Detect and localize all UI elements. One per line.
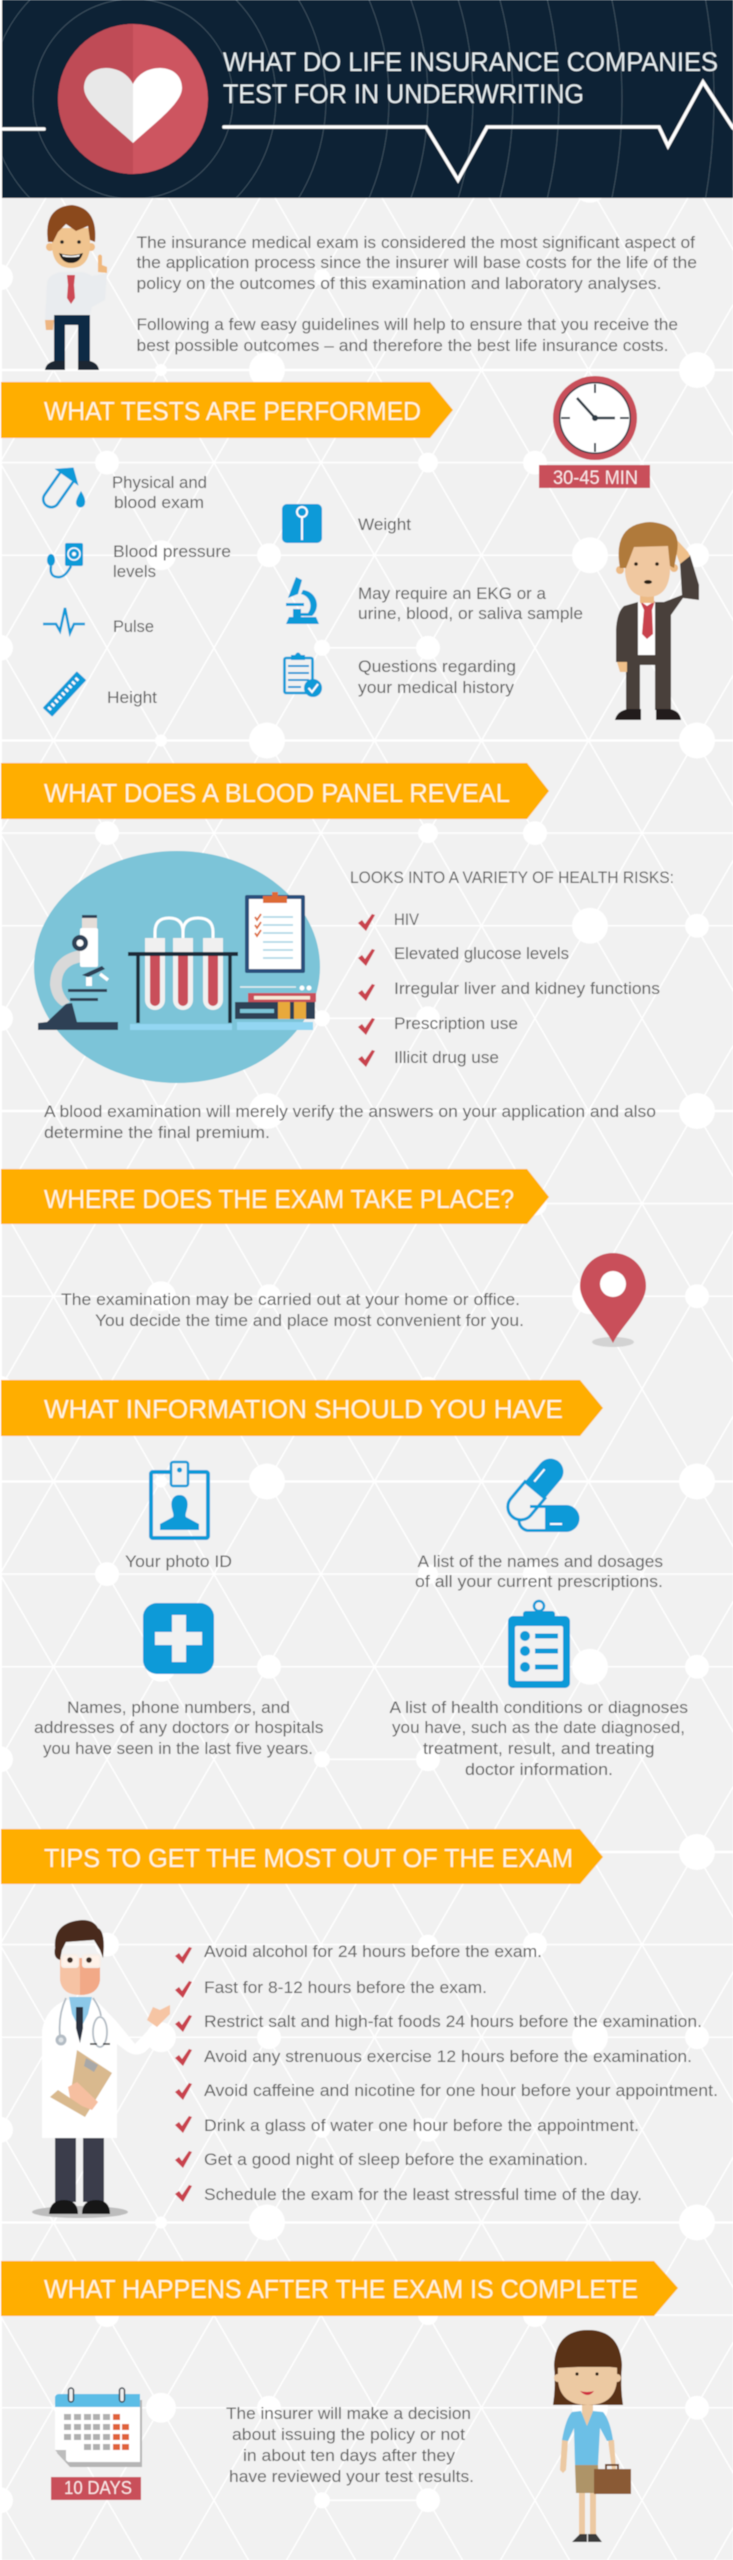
panel: after the exam: [1, 2261, 678, 2542]
heading banner: [1, 1380, 603, 1436]
text: blood pressure levels: [113, 543, 231, 581]
text: weight: Weight: [358, 516, 411, 534]
checklist: health risks: HIV: [394, 911, 419, 929]
text: location note: You decide the time and place most convenient for you.: [95, 1312, 524, 1330]
text: doctors: Names, phone numbers, and: [67, 1699, 290, 1717]
text: prescriptions: [415, 1553, 663, 1591]
checklist: exam tips: Drink a glass of water one hour before the appointment.: [204, 2117, 639, 2135]
checklist: exam tips: Get a good night of sleep before the examination.: [204, 2151, 588, 2169]
text: decision timing: in about ten days after they: [243, 2447, 456, 2465]
text: blood examination note: determine the final premium.: [44, 1124, 270, 1142]
text: intro paragraph 2: [136, 316, 678, 355]
heading banner: WHERE DOES THE EXAM TAKE PLACE?: [44, 1184, 514, 1214]
heading banner: [1, 1169, 549, 1224]
icon: microscope: [286, 577, 319, 624]
text: decision timing: have reviewed your test results.: [229, 2468, 474, 2486]
checklist: health risks: Elevated glucose levels: [394, 945, 569, 963]
heading banner: WHAT HAPPENS AFTER THE EXAM IS COMPLETE: [44, 2274, 638, 2304]
icon: checklist clipboard: [284, 652, 322, 697]
title: [223, 47, 718, 109]
heading banner: WHAT DOES A BLOOD PANEL REVEAL: [44, 778, 510, 808]
checklist: exam tips: Avoid any strenuous exercise 12 hours before the examination.: [204, 2048, 692, 2066]
heading banner: [1, 763, 549, 819]
character: pointing man: [45, 205, 107, 370]
icon: pulse: [43, 608, 85, 633]
text: blood examination note: [44, 1103, 656, 1142]
text: blood examination note: A blood examination will merely verify the answers on your application and also: [44, 1103, 656, 1121]
text: decision timing: The insurer will make a decision: [226, 2405, 471, 2423]
panel: what information should you have: [1, 1380, 688, 1779]
text: health conditions: [390, 1699, 688, 1779]
table: [130, 1022, 313, 1030]
text: blood pressure levels: levels: [113, 563, 156, 581]
panel: tips: [1, 1829, 718, 2218]
icon: list clipboard: [508, 1601, 570, 1688]
heading banner: [1, 382, 453, 438]
clipboard: [245, 892, 305, 973]
heading banner: WHAT INFORMATION SHOULD YOU HAVE: [44, 1394, 563, 1424]
text: intro paragraph 1: The insurance medical exam is considered the most significant aspect of: [136, 234, 695, 252]
text: blood pressure levels: Blood pressure: [113, 543, 231, 561]
text: health conditions: A list of health conditions or diagnoses: [390, 1699, 688, 1717]
checklist: health risks: [358, 911, 660, 1067]
text: doctors: addresses of any doctors or hospitals: [34, 1719, 324, 1737]
text: physical and blood exam: Physical and: [112, 474, 207, 492]
text: intro paragraph 2: best possible outcomes – and therefore the best life insurance costs.: [136, 337, 668, 355]
text: intro paragraph 1: policy on the outcomes of this examination and laboratory analyses.: [136, 275, 662, 293]
text: doctors: [34, 1699, 324, 1758]
checklist: exam tips: Restrict salt and high-fat foods 24 hours before the examination.: [204, 2013, 702, 2031]
label: duration: [539, 465, 650, 489]
text: health conditions: you have, such as the date diagnosed,: [392, 1719, 685, 1737]
illustration: laboratory: [34, 851, 320, 1083]
text: decision timing: about issuing the policy or not: [232, 2426, 465, 2444]
icon: blood pressure: [47, 543, 83, 577]
icon: flask: [38, 463, 85, 512]
label: ten days: 10 DAYS: [64, 2478, 132, 2498]
text: location note: The examination may be carried out at your home or office.: [61, 1291, 520, 1309]
text: doctors: you have seen in the last five years.: [43, 1740, 313, 1758]
checklist: exam tips: Fast for 8-12 hours before the exam.: [204, 1979, 487, 1997]
title: WHAT DO LIFE INSURANCE COMPANIES: [223, 47, 718, 77]
text: EKG or sample: urine, blood, or saliva sample: [358, 605, 583, 623]
heading banner: [1, 1829, 603, 1884]
panel: what does a blood panel reveal: [1, 763, 674, 1142]
text: location note: [61, 1291, 524, 1330]
title: TEST FOR IN UNDERWRITING: [223, 79, 584, 109]
heading banner: WHAT TESTS ARE PERFORMED: [44, 396, 421, 426]
text: prescriptions: A list of the names and dosages: [418, 1553, 663, 1571]
character: woman with briefcase: [553, 2330, 631, 2542]
icon: medical cross: [143, 1603, 214, 1674]
checklist: health risks: Irregular liver and kidney functions: [394, 980, 660, 998]
icon: heart in circle: [58, 24, 208, 174]
microscope: [38, 915, 118, 1030]
text: health conditions: treatment, result, and treating: [423, 1740, 654, 1758]
text: medical history questions: your medical history: [358, 679, 515, 697]
checklist: exam tips: [175, 1943, 718, 2204]
heading banner: TIPS TO GET THE MOST OUT OF THE EXAM: [44, 1843, 573, 1873]
checklist: exam tips: Avoid alcohol for 24 hours before the exam.: [204, 1943, 542, 1961]
icon: pills: [503, 1453, 580, 1532]
text: intro paragraph 1: [136, 234, 697, 293]
text: physical and blood exam: blood exam: [114, 494, 204, 512]
text: pulse: Pulse: [113, 618, 154, 636]
text: intro paragraph 1: the application process since the insurer will base costs for the life of the: [136, 254, 697, 272]
checklist: health risks: Illicit drug use: [394, 1049, 499, 1067]
icon: calendar: [55, 2388, 142, 2467]
panel: introduction: [45, 205, 697, 370]
icon: location pin: [580, 1253, 646, 1347]
text: physical and blood exam: [112, 474, 207, 512]
character: thinking man: [615, 522, 699, 720]
panel: header: [1, 0, 733, 199]
character: doctor: [32, 1920, 170, 2218]
text: medical history questions: Questions regarding: [358, 658, 516, 676]
checklist: exam tips: Schedule the exam for the least stressful time of the day.: [204, 2186, 642, 2204]
text: medical history questions: [358, 658, 516, 697]
text: prescriptions: of all your current prescriptions.: [415, 1573, 663, 1591]
heading banner: [1, 2261, 678, 2316]
text: photo id: Your photo ID: [125, 1553, 232, 1571]
checklist: exam tips: Avoid caffeine and nicotine for one hour before your appointment.: [204, 2082, 718, 2100]
books: [235, 986, 316, 1019]
heartbeat line: [2, 82, 733, 180]
text: health conditions: doctor information.: [465, 1761, 613, 1779]
panel: where does the exam take place: [1, 1169, 646, 1347]
text: EKG or sample: [358, 585, 583, 623]
text: EKG or sample: May require an EKG or a: [358, 585, 547, 603]
checklist: health risks: Prescription use: [394, 1015, 518, 1033]
test tubes: [128, 918, 238, 1023]
panel: what tests are performed: [1, 376, 699, 720]
label: duration: 30-45 MIN: [553, 468, 638, 489]
text: intro paragraph 2: Following a few easy guidelines will help to ensure that you receive the: [136, 316, 678, 334]
icon: clock: [553, 376, 637, 460]
icon: photo id: [151, 1462, 208, 1538]
text: list heading: LOOKS INTO A VARIETY OF HEALTH RISKS:: [350, 869, 674, 887]
icon: ruler: [43, 671, 86, 717]
text: height: Height: [107, 689, 157, 707]
icon: weight scale: [282, 504, 322, 543]
text: decision timing: [226, 2405, 474, 2486]
